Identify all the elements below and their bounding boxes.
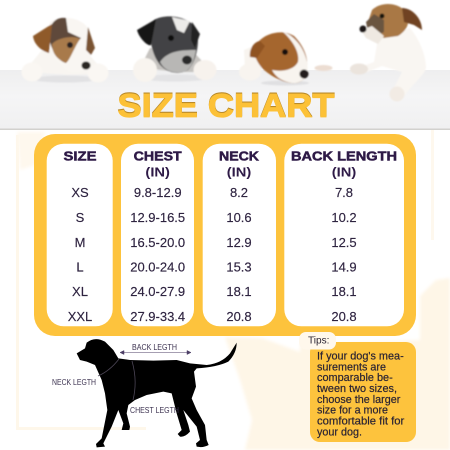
column: neck: 18.1 — [226, 284, 252, 299]
column: size — [47, 144, 113, 326]
size chart panel — [34, 134, 416, 336]
tips text: surements are — [317, 361, 386, 373]
column: neck: (IN) — [227, 164, 251, 180]
column: size: L — [76, 260, 84, 274]
white banner band — [0, 70, 450, 130]
tips text: comparable be- — [317, 372, 393, 384]
column: neck: 8.2 — [230, 185, 248, 200]
column: back length: 20.8 — [331, 309, 357, 324]
icon: black dog silhouette — [77, 339, 237, 447]
column: back length: 14.9 — [331, 260, 357, 274]
column: back length: 10.2 — [331, 210, 357, 225]
column: size: S — [76, 210, 85, 225]
label: back length: BACK LEGTH — [132, 343, 177, 352]
column: back length: 12.5 — [331, 235, 357, 250]
column: chest: 12.9-16.5 — [130, 210, 185, 225]
tips text: your dog. — [317, 426, 362, 438]
column: back length: 7.8 — [335, 185, 353, 200]
tips text: size for a more — [317, 405, 388, 417]
tips text: choose the larger — [317, 394, 401, 406]
panel: yellow frame — [34, 134, 416, 336]
tips text — [317, 350, 405, 438]
title: SIZE CHART — [118, 87, 334, 124]
column: chest: CHEST — [134, 148, 182, 164]
puppy 3 — [239, 32, 332, 86]
puppy 4 — [350, 4, 426, 102]
arrow: back length — [120, 350, 191, 354]
icon: neck strap — [98, 359, 119, 376]
column: back length: (IN) — [332, 164, 356, 180]
column: chest: 24.0-27.9 — [130, 284, 185, 299]
tips tag: Tips: — [308, 334, 330, 346]
panel: tips body — [310, 342, 416, 442]
puppy 1 — [22, 18, 108, 82]
column: neck: 20.8 — [226, 309, 252, 324]
column: size: SIZE — [64, 148, 97, 164]
column: neck: 15.3 — [226, 260, 252, 274]
column: chest — [121, 144, 194, 326]
puppy 2 — [133, 16, 216, 82]
column: back length: BACK LENGTH — [291, 148, 397, 164]
column: chest: 16.5-20.0 — [130, 235, 185, 250]
tips text: tween two sizes, — [317, 383, 397, 395]
title: SIZE CHART — [118, 86, 334, 123]
column: size: XS — [71, 185, 89, 200]
tips text: If your dog's mea- — [317, 350, 404, 362]
column: chest: 27.9-33.4 — [130, 309, 185, 324]
icon: chest strap — [132, 361, 135, 400]
column: back length: 18.1 — [331, 284, 357, 299]
column: neck — [203, 144, 276, 326]
column: size: M — [75, 235, 85, 250]
column: chest: (IN) — [145, 164, 170, 180]
column: chest: 9.8-12.9 — [134, 185, 182, 200]
column: neck: 12.9 — [226, 235, 252, 250]
column: neck: 10.6 — [226, 210, 252, 225]
tips text: comfortable fit for — [317, 416, 405, 428]
tips callout — [299, 332, 416, 442]
column: back length — [284, 144, 404, 326]
column: size: XL — [72, 284, 88, 299]
column: chest: 20.0-24.0 — [130, 260, 185, 274]
column: size: XXL — [68, 309, 92, 324]
label: chest length: CHEST LEGTH — [130, 406, 179, 415]
column: neck: NECK — [219, 148, 260, 164]
label: neck length: NECK LEGTH — [52, 378, 96, 387]
dog silhouette with measurements — [52, 339, 237, 447]
